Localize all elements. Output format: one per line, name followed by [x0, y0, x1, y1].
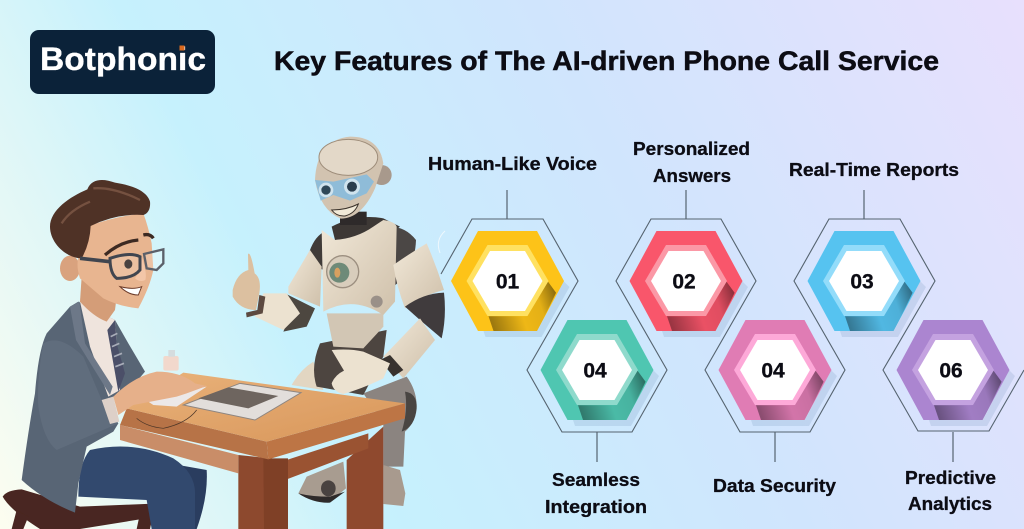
shirt and tie [70, 302, 125, 397]
feature 05: Data Security: 04 [761, 360, 785, 382]
feature 03: Real-Time Reports: Real-Time Reports [789, 160, 959, 180]
feature 04: Seamless Integration: 04 [583, 360, 607, 382]
feature 03: Real-Time Reports [789, 160, 959, 337]
small arc near robot arm [438, 231, 445, 253]
bottle [163, 350, 179, 371]
feature 02: Personalized Answers: Answers [653, 166, 731, 186]
title: Key Features of The AI-driven Phone Call Service [274, 46, 939, 76]
illustration: man at desk [3, 180, 207, 529]
woven hexagon outline [441, 219, 1024, 432]
illustration: robot [233, 137, 445, 506]
feature 02: Personalized Answers: 02 [672, 270, 696, 294]
feature 06: Predictive Analytics: Analytics [908, 494, 992, 514]
feature 01: Human-Like Voice: 01 [496, 270, 519, 294]
feature 03: Real-Time Reports: 03 [850, 270, 874, 294]
head [50, 180, 163, 308]
trousers [78, 446, 207, 529]
illustration: desk with keyboard [120, 373, 405, 529]
feature 01: Human-Like Voice: Human-Like Voice [428, 154, 597, 174]
feature 06: Predictive Analytics: 06 [939, 360, 963, 382]
feature 01: Human-Like Voice [428, 154, 597, 337]
suit jacket [22, 302, 145, 513]
feature 05: Data Security: Data Security [713, 476, 836, 496]
hand [113, 372, 207, 415]
cuff [102, 397, 119, 424]
feature 04: Seamless Integration: Seamless [552, 470, 640, 490]
logo: Botphonic [30, 30, 215, 94]
feature 02: Personalized Answers: Personalized [633, 139, 750, 159]
feature 05: Data Security [713, 320, 837, 496]
feature 02: Personalized Answers [630, 139, 750, 337]
feature 06: Predictive Analytics: Predictive [905, 468, 996, 488]
feature 04: Seamless Integration [540, 320, 659, 517]
feature 04: Seamless Integration: Integration [545, 497, 647, 517]
neck [80, 277, 117, 322]
feature 06: Predictive Analytics [896, 320, 1015, 514]
stool [3, 489, 160, 529]
logo: Botphonic: Botphonic [40, 41, 206, 77]
